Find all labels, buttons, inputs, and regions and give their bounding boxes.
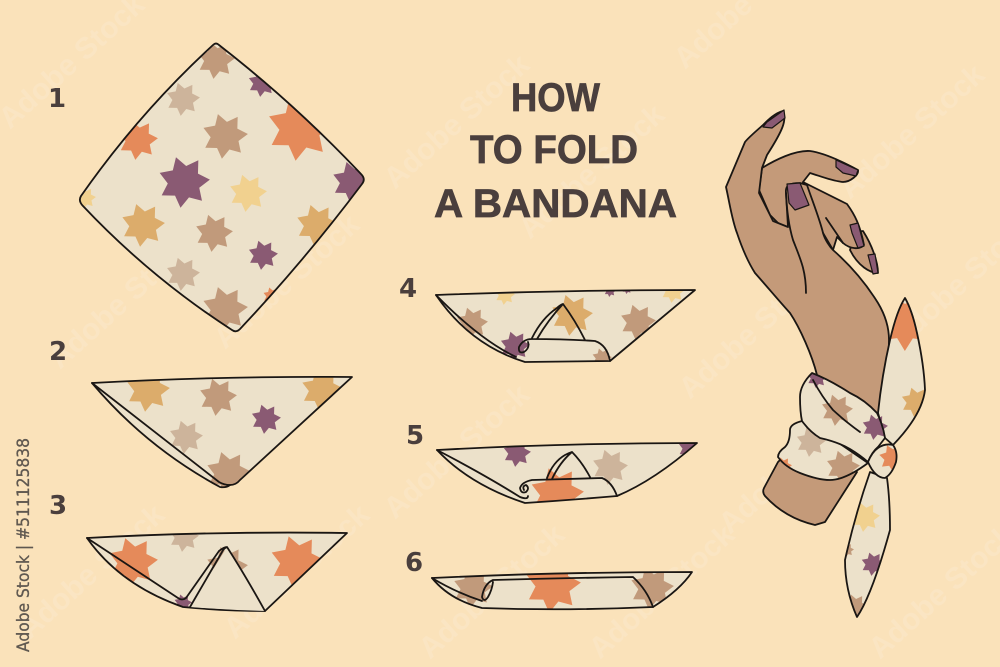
ring finger xyxy=(803,182,864,250)
step numbers xyxy=(48,84,424,578)
faint repeating watermark: Adobe Stock xyxy=(513,98,671,245)
faint repeating watermark: Adobe Stock xyxy=(413,518,571,665)
stock id vertical text: Adobe Stock | #511125838 xyxy=(14,438,34,652)
step 5: second roll xyxy=(436,442,698,504)
faint repeating watermark: Adobe Stock xyxy=(583,518,741,665)
faint repeating watermark: Adobe Stock xyxy=(43,228,201,375)
title: A BANDANA xyxy=(434,182,677,226)
faint repeating watermark: Adobe Stock xyxy=(833,58,991,205)
fingernails xyxy=(763,110,878,274)
bandana lower band xyxy=(777,420,868,481)
step 1: open square bandana xyxy=(71,36,378,336)
forearm below bandana xyxy=(763,440,857,525)
bandana upper loop xyxy=(799,372,886,462)
faint repeating watermark: Adobe Stock xyxy=(378,48,536,195)
step numbers: 5 xyxy=(406,421,424,451)
step numbers: 2 xyxy=(49,337,67,367)
faint repeating watermark: Adobe Stock xyxy=(13,498,171,645)
step 4: first roll xyxy=(436,276,695,370)
hand with wrapped bandana xyxy=(726,110,943,622)
faint repeating watermark: Adobe Stock xyxy=(208,208,366,355)
palm crease xyxy=(786,193,806,293)
bandana lower tail xyxy=(844,471,891,618)
step numbers: 4 xyxy=(399,274,417,304)
bandana upper tail xyxy=(877,297,926,446)
upper finger xyxy=(759,151,858,235)
step numbers: 6 xyxy=(405,548,423,578)
faint repeating watermark: Adobe Stock xyxy=(218,498,376,645)
bandana knot xyxy=(868,444,898,479)
faint repeating watermark: Adobe Stock xyxy=(713,393,871,540)
step numbers: 1 xyxy=(48,84,66,114)
faint repeating watermark: Adobe Stock xyxy=(378,378,536,525)
title: HOW xyxy=(511,76,600,120)
step 6: finished roll xyxy=(432,550,692,617)
palm and thumb xyxy=(726,111,889,415)
step 3: centre point folded up xyxy=(87,518,347,613)
little finger xyxy=(850,231,878,273)
step numbers: 3 xyxy=(49,491,67,521)
faint repeating watermark: Adobe Stock xyxy=(673,258,831,405)
step 2: folded in half xyxy=(91,376,353,488)
title: TO FOLD xyxy=(470,128,638,172)
title xyxy=(434,76,677,226)
